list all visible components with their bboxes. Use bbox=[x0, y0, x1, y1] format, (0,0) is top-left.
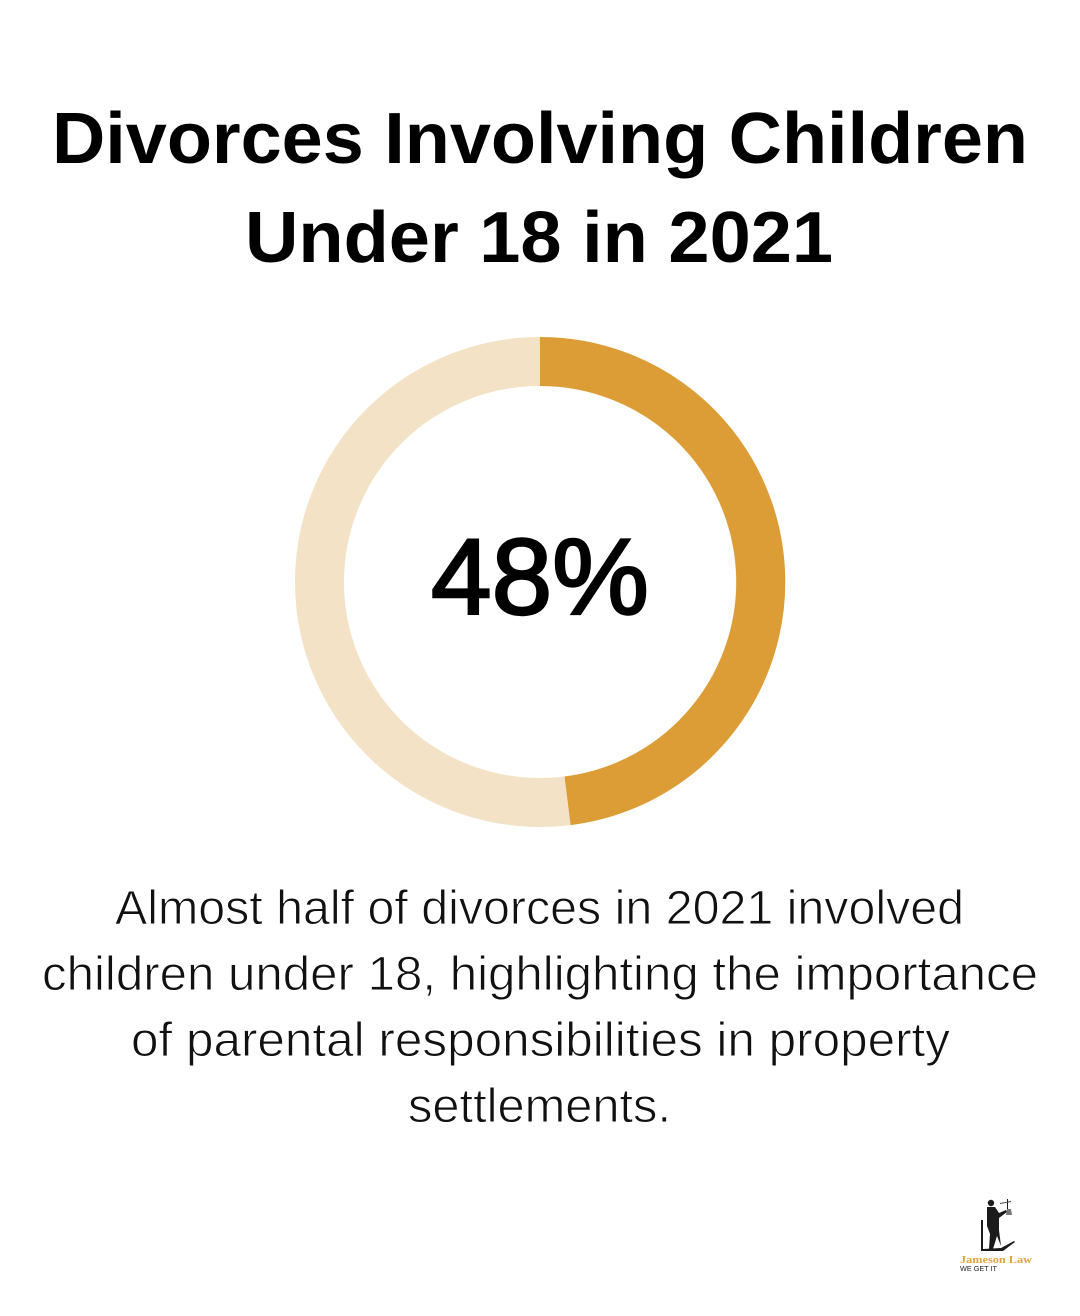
icon: lady justice bbox=[981, 1199, 1015, 1251]
title: Under 18 in 2021 bbox=[245, 198, 833, 278]
donut chart: 48% bbox=[320, 361, 761, 802]
donut value: 48% bbox=[431, 516, 649, 637]
logo name: Jameson Law bbox=[960, 1255, 1032, 1266]
description text: of parental responsibilities in property bbox=[131, 1014, 950, 1067]
description text: settlements. bbox=[408, 1080, 671, 1133]
description text bbox=[42, 882, 1038, 1133]
logo tagline: WE GET IT bbox=[960, 1266, 998, 1273]
title bbox=[52, 99, 1028, 278]
title: Divorces Involving Children bbox=[52, 99, 1028, 179]
logo: Jameson Law bbox=[960, 1199, 1032, 1273]
description text: Almost half of divorces in 2021 involved bbox=[115, 882, 964, 935]
description text: children under 18, highlighting the importance bbox=[42, 948, 1038, 1001]
